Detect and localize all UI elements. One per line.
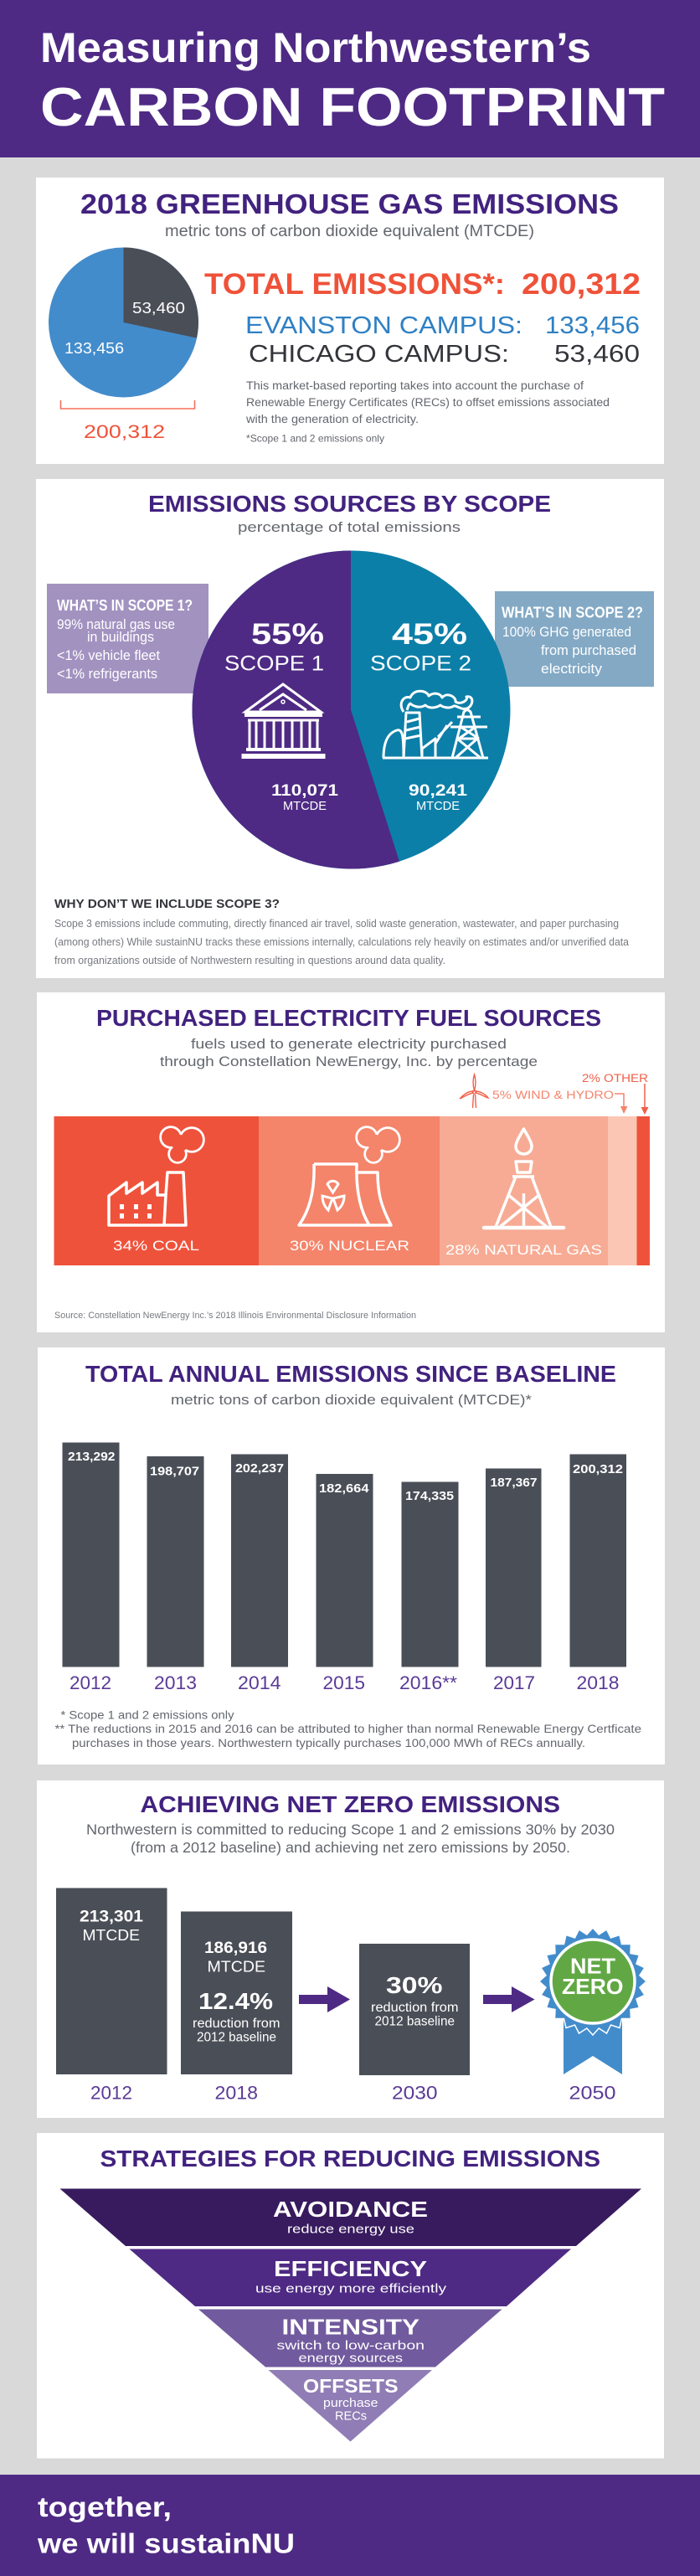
bar 2013 (147, 1456, 204, 1693)
scope 1 total: MTCDE (283, 800, 327, 813)
icon: wind turbine (460, 1074, 488, 1108)
explanatory text: Renewable Energy Certificates (RECs) to offset emissions associated (246, 396, 610, 409)
subheading: metric tons of carbon dioxide equivalent (MTCDE)* (171, 1393, 533, 1408)
scope 2 description: 100% GHG generated (502, 625, 631, 640)
bar 2030: reduction from (371, 2001, 459, 2015)
total emissions: TOTAL EMISSIONS*: (204, 268, 505, 301)
bar 2013: 198,707 (150, 1464, 199, 1479)
icon: nuclear plant (299, 1127, 399, 1225)
commitment statement (86, 1821, 615, 1856)
funnel tier: efficiency: EFFICIENCY (274, 2256, 427, 2281)
pie total value: 200,312 (84, 421, 165, 442)
total emissions: 200,312 (522, 268, 641, 301)
funnel tier: intensity (198, 2310, 502, 2367)
pie chart: campus split: 133,456 (64, 340, 124, 357)
heading: TOTAL ANNUAL EMISSIONS SINCE BASELINE (85, 1361, 616, 1387)
bar 2013: 2013 (154, 1672, 197, 1693)
arrow: wind and hydro (615, 1094, 628, 1114)
scope 1 total: 110,071 (271, 782, 339, 800)
scope 2 total (409, 782, 468, 813)
icon: power plant and pylon (383, 691, 488, 758)
heading: PURCHASED ELECTRICITY FUEL SOURCES (96, 1005, 601, 1031)
scope 3 explanation: from organizations outside of Northwestern resulting in questions around data quality. (54, 955, 445, 966)
scope 2 description: from purchased (541, 643, 636, 658)
stacked bar: fuel sources (54, 1116, 650, 1265)
header banner (0, 0, 700, 157)
panel: emissions sources by scope (36, 479, 664, 978)
commitment statement: (from a 2012 baseline) and achieving net zero emissions by 2050. (131, 1839, 570, 1856)
explanatory text (245, 379, 610, 425)
scope 1 description: <1% refrigerants (57, 667, 157, 682)
subheading: percentage of total emissions (238, 519, 461, 535)
scope 2 percentage: SCOPE 2 (370, 652, 471, 675)
scope 1 description: 99% natural gas use (57, 617, 175, 632)
bar 2012: MTCDE (82, 1927, 140, 1944)
bar 2015: 182,664 (319, 1481, 369, 1496)
bar 2015 (317, 1474, 373, 1693)
bar 2012: 2012 (69, 1672, 111, 1693)
label: 5% wind and hydro: 5% WIND & HYDRO (492, 1089, 614, 1101)
icon: net zero badge: ZERO (562, 1974, 623, 1999)
scope 2 percentage (370, 618, 471, 675)
footnotes: * Scope 1 and 2 emissions only (60, 1708, 234, 1722)
pie chart: campus split: 53,460 (132, 300, 185, 317)
icon: gas derrick (484, 1129, 564, 1228)
footnote: *Scope 1 and 2 emissions only (246, 432, 384, 444)
Chicago campus: 53,460 (554, 341, 640, 368)
bar 2017: 187,367 (491, 1476, 538, 1490)
funnel tier: avoidance (60, 2189, 641, 2246)
icon: university building (241, 684, 325, 759)
subheading: through Constellation NewEnergy, Inc. by percentage (160, 1054, 538, 1069)
tagline: together, (38, 2491, 172, 2522)
scope 3 explanation: (among others) While sustainNU tracks these emissions internally, calculations rely heavily on estimates and/or unverified data (54, 936, 629, 948)
panel: total annual emissions since baseline (38, 1347, 665, 1765)
bar 2016 (399, 1482, 459, 1693)
scope 1 description: in buildings (87, 630, 154, 645)
funnel tier: avoidance: AVOIDANCE (273, 2197, 428, 2222)
bar 2012: 2012 (90, 2082, 132, 2104)
bar 2030: 2012 baseline (375, 2015, 455, 2028)
Evanston campus (245, 312, 640, 339)
footnotes: ** The reductions in 2015 and 2016 can be attributed to higher than normal Renewable Energy Certficate (55, 1722, 641, 1735)
funnel tier: offsets: RECs (335, 2409, 367, 2424)
bar 2018: 2012 baseline (197, 2030, 276, 2045)
scope 3 explanation: Scope 3 emissions include commuting, directly financed air travel, solid waste generation, wastewater, and paper purchasing (54, 918, 619, 930)
bar 2018: 2018 (214, 2082, 258, 2104)
subheading (160, 1036, 538, 1069)
scope 3 explanation (54, 918, 629, 966)
bar 2014: 2014 (238, 1672, 281, 1693)
funnel tier: intensity: switch to low-carbon (276, 2338, 425, 2353)
subheading: fuels used to generate electricity purchased (191, 1036, 507, 1052)
scope 1 total (271, 782, 339, 813)
bar chart (62, 1442, 626, 1693)
scope 2 description: WHAT’S IN SCOPE 2? (502, 603, 643, 621)
source note: Source: Constellation NewEnergy Inc.’s 2018 Illinois Environmental Disclosure Information (54, 1311, 416, 1321)
label: nuclear: 30% NUCLEAR (290, 1238, 409, 1254)
bar 2012 (56, 1888, 167, 2104)
subheading: metric tons of carbon dioxide equivalent (MTCDE) (165, 223, 534, 240)
bar 2018 (569, 1454, 626, 1693)
bar 2030 (359, 1944, 470, 2104)
funnel tier: offsets: purchase (323, 2396, 378, 2410)
explanatory text: with the generation of electricity. (245, 413, 419, 425)
Evanston campus: EVANSTON CAMPUS: (245, 312, 522, 339)
scope 1 percentage (224, 618, 324, 675)
heading: EMISSIONS SOURCES BY SCOPE (148, 491, 551, 517)
icon: net zero badge (539, 1928, 646, 2074)
funnel tier: offsets: OFFSETS (303, 2375, 399, 2397)
bar 2014 (231, 1454, 288, 1693)
footnotes: purchases in those years. Northwestern typically purchases 100,000 MWh of RECs annually. (72, 1736, 585, 1749)
title line 2: CARBON FOOTPRINT (40, 76, 665, 137)
scope 1 description: <1% vehicle fleet (57, 648, 160, 663)
label: natural gas: 28% NATURAL GAS (445, 1242, 602, 1258)
bar 2017 (486, 1469, 541, 1693)
year label 2050: 2050 (569, 2082, 616, 2104)
tagline (37, 2491, 295, 2559)
panel: purchased electricity fuel sources (37, 992, 665, 1332)
Evanston campus: 133,456 (545, 312, 640, 339)
tagline: we will sustainNU (37, 2527, 295, 2559)
Chicago campus: CHICAGO CAMPUS: (249, 341, 509, 368)
funnel tier: efficiency (129, 2249, 571, 2306)
bar 2018: reduction from (193, 2017, 280, 2031)
heading: 2018 GREENHOUSE GAS EMISSIONS (80, 188, 619, 219)
panel: 2018 greenhouse gas emissions (36, 178, 664, 464)
scope 1 description: WHAT’S IN SCOPE 1? (57, 596, 193, 614)
funnel tier: intensity: energy sources (298, 2352, 403, 2365)
bar 2018: 2018 (576, 1672, 620, 1693)
pie total bracket (60, 400, 194, 409)
label: coal: 34% COAL (113, 1238, 199, 1254)
scope 2 description: electricity (541, 662, 603, 677)
funnel tier: efficiency: use energy more efficiently (255, 2281, 447, 2296)
bar 2018: 186,916 (204, 1940, 267, 1957)
scope 2 total: 90,241 (409, 782, 468, 800)
funnel tier: intensity: INTENSITY (281, 2315, 419, 2340)
pie chart: campus split (49, 248, 198, 397)
footer banner (0, 2475, 700, 2576)
arrow (299, 1986, 350, 2012)
heading: STRATEGIES FOR REDUCING EMISSIONS (100, 2146, 600, 2172)
explanatory text: This market-based reporting takes into account the purchase of (246, 379, 584, 392)
scope 2 description (502, 603, 643, 677)
bar 2012: 213,301 (80, 1908, 143, 1926)
bar 2016: 2016** (399, 1672, 457, 1693)
scope 3 heading: WHY DON’T WE INCLUDE SCOPE 3? (54, 898, 280, 911)
bar 2012: 213,292 (68, 1450, 116, 1464)
panel: strategies for reducing emissions (37, 2133, 664, 2459)
total emissions (204, 268, 641, 301)
label: 2% other: 2% OTHER (582, 1072, 648, 1084)
bar 2016: 174,335 (405, 1489, 454, 1503)
bar 2030: 2030 (392, 2082, 437, 2104)
panel: achieving net zero emissions (37, 1780, 664, 2118)
bar 2030: 30% (386, 1972, 443, 1998)
funnel tier: avoidance: reduce energy use (287, 2223, 414, 2236)
bar 2014: 202,237 (235, 1461, 284, 1476)
icon: net zero badge: NET (570, 1953, 615, 1978)
scope 1 percentage: SCOPE 1 (224, 652, 324, 675)
footnotes (55, 1708, 641, 1749)
bar 2015: 2015 (323, 1672, 365, 1693)
commitment statement: Northwestern is committed to reducing Scope 1 and 2 emissions 30% by 2030 (86, 1821, 615, 1837)
scope 2 total: MTCDE (416, 800, 460, 813)
arrow (483, 1986, 534, 2012)
bar 2017: 2017 (493, 1672, 535, 1693)
scope 1 percentage: 55% (251, 618, 324, 651)
icon: coal factory (109, 1127, 203, 1225)
funnel tier: offsets (268, 2370, 432, 2442)
scope 2 percentage: 45% (392, 618, 467, 651)
callout: scope 1 box (47, 584, 208, 693)
pie chart: scope split (193, 551, 511, 869)
bar 2018: MTCDE (208, 1958, 265, 1975)
arrow: other (641, 1084, 648, 1115)
heading: ACHIEVING NET ZERO EMISSIONS (141, 1791, 560, 1817)
bar 2018: 12.4% (198, 1988, 273, 2014)
Chicago campus (249, 341, 640, 368)
bar 2012 (62, 1442, 119, 1693)
bar 2018: 200,312 (573, 1462, 623, 1476)
title line 1: Measuring Northwestern’s (40, 24, 591, 71)
bar 2018 (181, 1911, 292, 2104)
callout: scope 2 box (495, 591, 654, 687)
scope 1 description (57, 596, 193, 682)
